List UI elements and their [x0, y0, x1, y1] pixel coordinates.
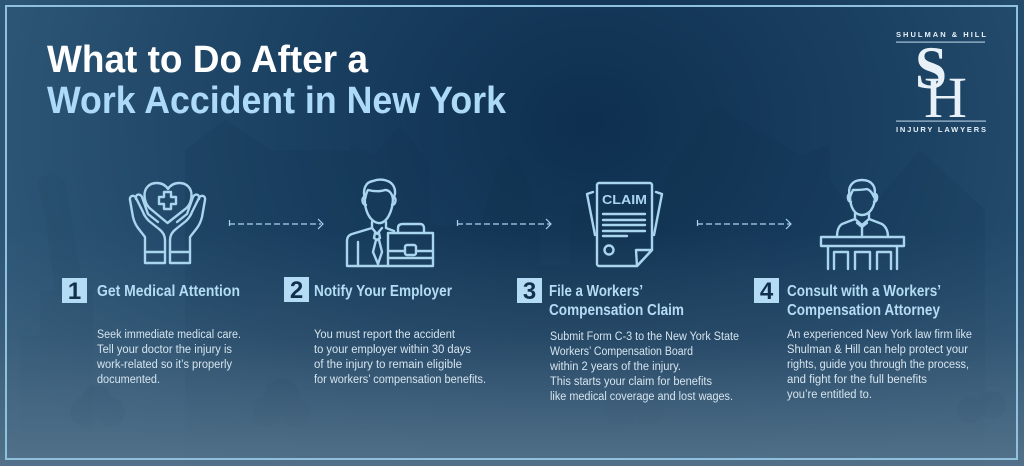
logo: Shulman & Hill: INJURY LAWYERS [896, 125, 986, 134]
step 4 [754, 278, 972, 401]
icon: employee with briefcase [347, 180, 433, 266]
step 2 body: to your employer within 30 days [314, 344, 471, 356]
number badge 3: 3 [523, 278, 536, 305]
step 4 heading: Consult with a Workers’ [787, 283, 941, 300]
step 4 heading [787, 283, 941, 319]
step 1 [62, 278, 241, 386]
step 2 body: You must report the accident [314, 329, 456, 341]
step 2 body: for workers’ compensation benefits. [314, 374, 486, 386]
step 1 heading: Get Medical Attention [97, 283, 240, 300]
title [47, 39, 507, 122]
title line 2: Work Accident in New York [47, 80, 507, 122]
number badge 4: 4 [760, 278, 774, 305]
number badge 1 [62, 278, 87, 305]
step 4 body: An experienced New York law firm like [787, 329, 972, 341]
step 2 body: of the injury to remain eligible [314, 359, 462, 371]
step 3 heading: Compensation Claim [549, 302, 684, 319]
step 2 [284, 277, 486, 386]
logo: Shulman & Hill: H [924, 65, 967, 130]
step 4 body: you’re entitled to. [787, 389, 872, 401]
step 1 body: Tell your doctor the injury is [97, 344, 232, 356]
step 4 body: rights, guide you through the process, [787, 359, 969, 371]
step 4 heading: Compensation Attorney [787, 302, 940, 319]
icon: claim document [587, 183, 662, 266]
step 1 body [96, 329, 241, 386]
step 3 body [549, 331, 739, 403]
step 3 body: Submit Form C-3 to the New York State [550, 331, 739, 343]
step 3 body: within 2 years of the injury. [549, 361, 681, 373]
logo: Shulman & Hill [896, 30, 986, 134]
number badge 2 [284, 277, 309, 304]
step 1 body: Seek immediate medical care. [97, 329, 241, 341]
step 4 body: and fight for the full benefits [787, 374, 927, 386]
arrow 2 [457, 219, 551, 229]
step 2 body [314, 329, 486, 386]
number badge 4 [754, 278, 779, 305]
step 4 body: Shulman & Hill can help protect your [787, 344, 968, 356]
title line 1: What to Do After a [47, 39, 369, 81]
step 3 heading [549, 283, 684, 319]
number badge 1: 1 [68, 278, 81, 305]
icon: hands holding heart [130, 183, 205, 263]
logo: Shulman & Hill: SHULMAN & HILL [896, 30, 986, 39]
arrow 1 [229, 219, 323, 229]
number badge 2: 2 [290, 277, 303, 304]
step 2 heading: Notify Your Employer [314, 283, 452, 300]
step 4 body [787, 329, 972, 401]
icon: attorney at desk [821, 180, 904, 269]
claim label: CLAIM [602, 192, 647, 207]
step 3 [517, 278, 739, 403]
step 1 body: documented. [97, 374, 160, 386]
step 3 heading: File a Workers’ [549, 283, 643, 300]
step 3 body: This starts your claim for benefits [550, 376, 712, 388]
step 3 body: like medical coverage and lost wages. [550, 391, 733, 403]
number badge 3 [517, 278, 542, 305]
step 1 body: work-related so it’s properly [96, 359, 232, 371]
logo: Shulman & Hill: S [915, 35, 947, 101]
arrow 3 [697, 219, 791, 229]
step 3 body: Workers’ Compensation Board [550, 346, 693, 358]
